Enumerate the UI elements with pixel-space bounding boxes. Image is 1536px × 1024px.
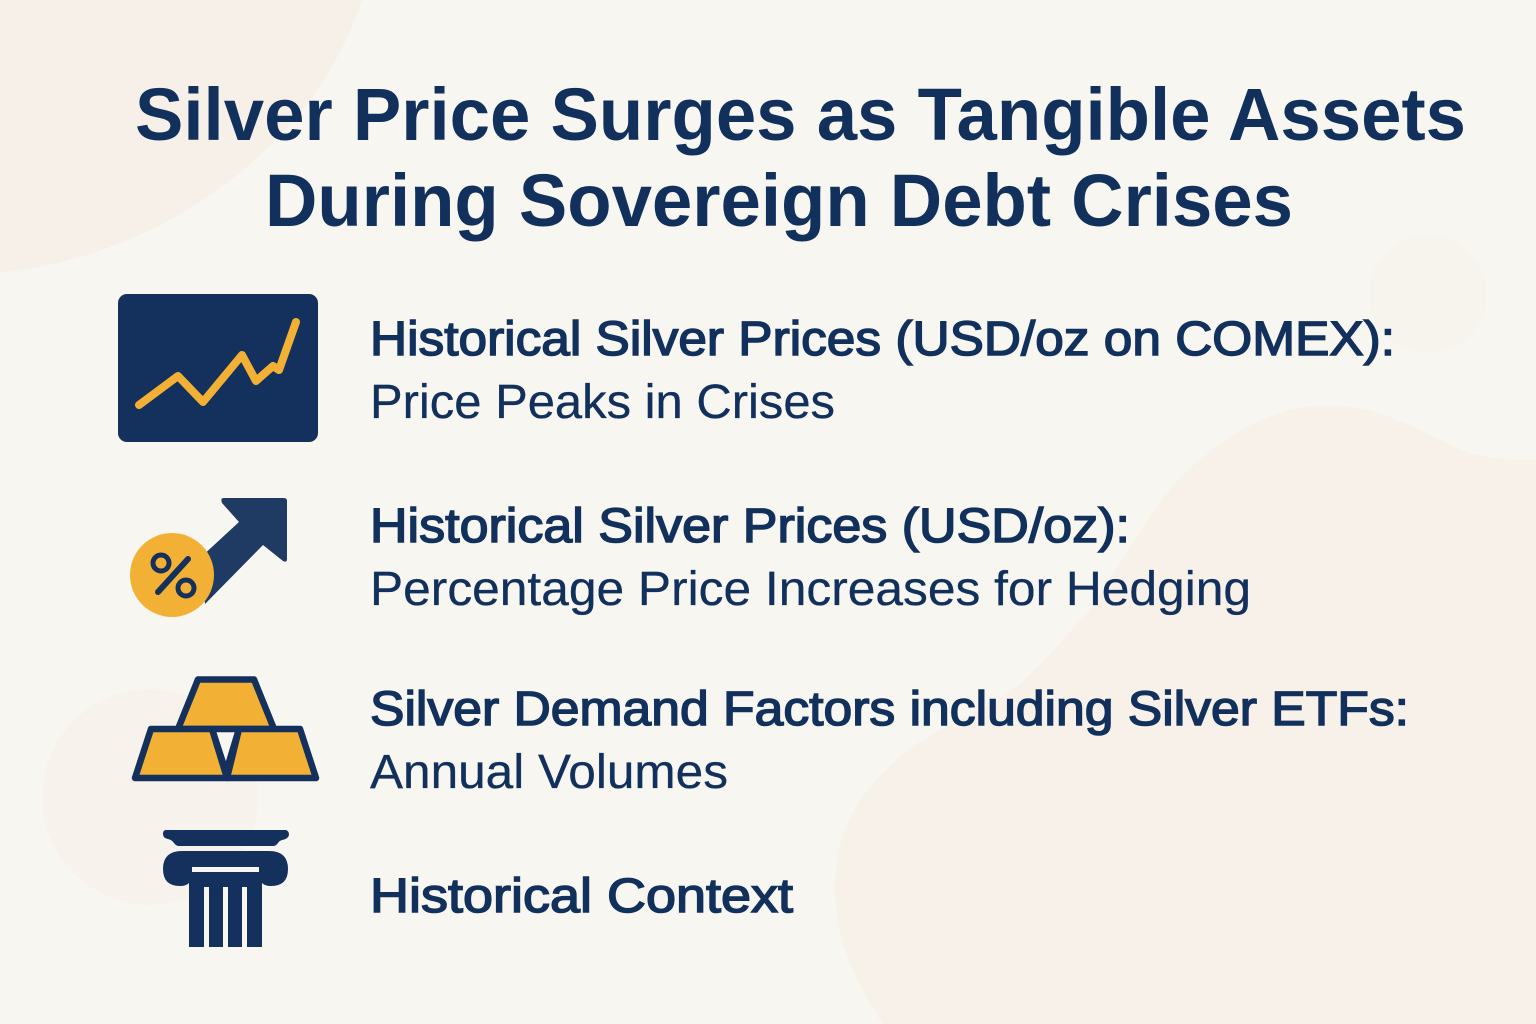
icon: classical column xyxy=(163,830,289,947)
text block: percentage increases: Percentage Price Increases for Hedging xyxy=(370,563,1251,616)
text block: percentage increases xyxy=(370,500,1251,616)
title: Silver Price Surges as Tangible Assets xyxy=(135,73,1466,156)
text block: demand factors: Silver Demand Factors including Silver ETFs: xyxy=(370,683,1409,736)
text block: historical context: Historical Context xyxy=(370,870,793,923)
icon: gold bars xyxy=(135,680,316,778)
text block: price peaks: Price Peaks in Crises xyxy=(370,376,835,429)
text block: demand factors: Annual Volumes xyxy=(370,746,728,799)
text block: percentage increases: Historical Silver Prices (USD/oz): xyxy=(370,500,1130,553)
text block: demand factors xyxy=(370,683,1409,799)
icon: percent with rising arrow xyxy=(130,498,287,617)
title: During Sovereign Debt Crises xyxy=(265,159,1293,242)
title xyxy=(135,73,1466,242)
icon: line chart xyxy=(118,294,318,442)
text block: price peaks xyxy=(370,313,1395,429)
text block: price peaks: Historical Silver Prices (USD/oz on COMEX): xyxy=(370,313,1395,366)
